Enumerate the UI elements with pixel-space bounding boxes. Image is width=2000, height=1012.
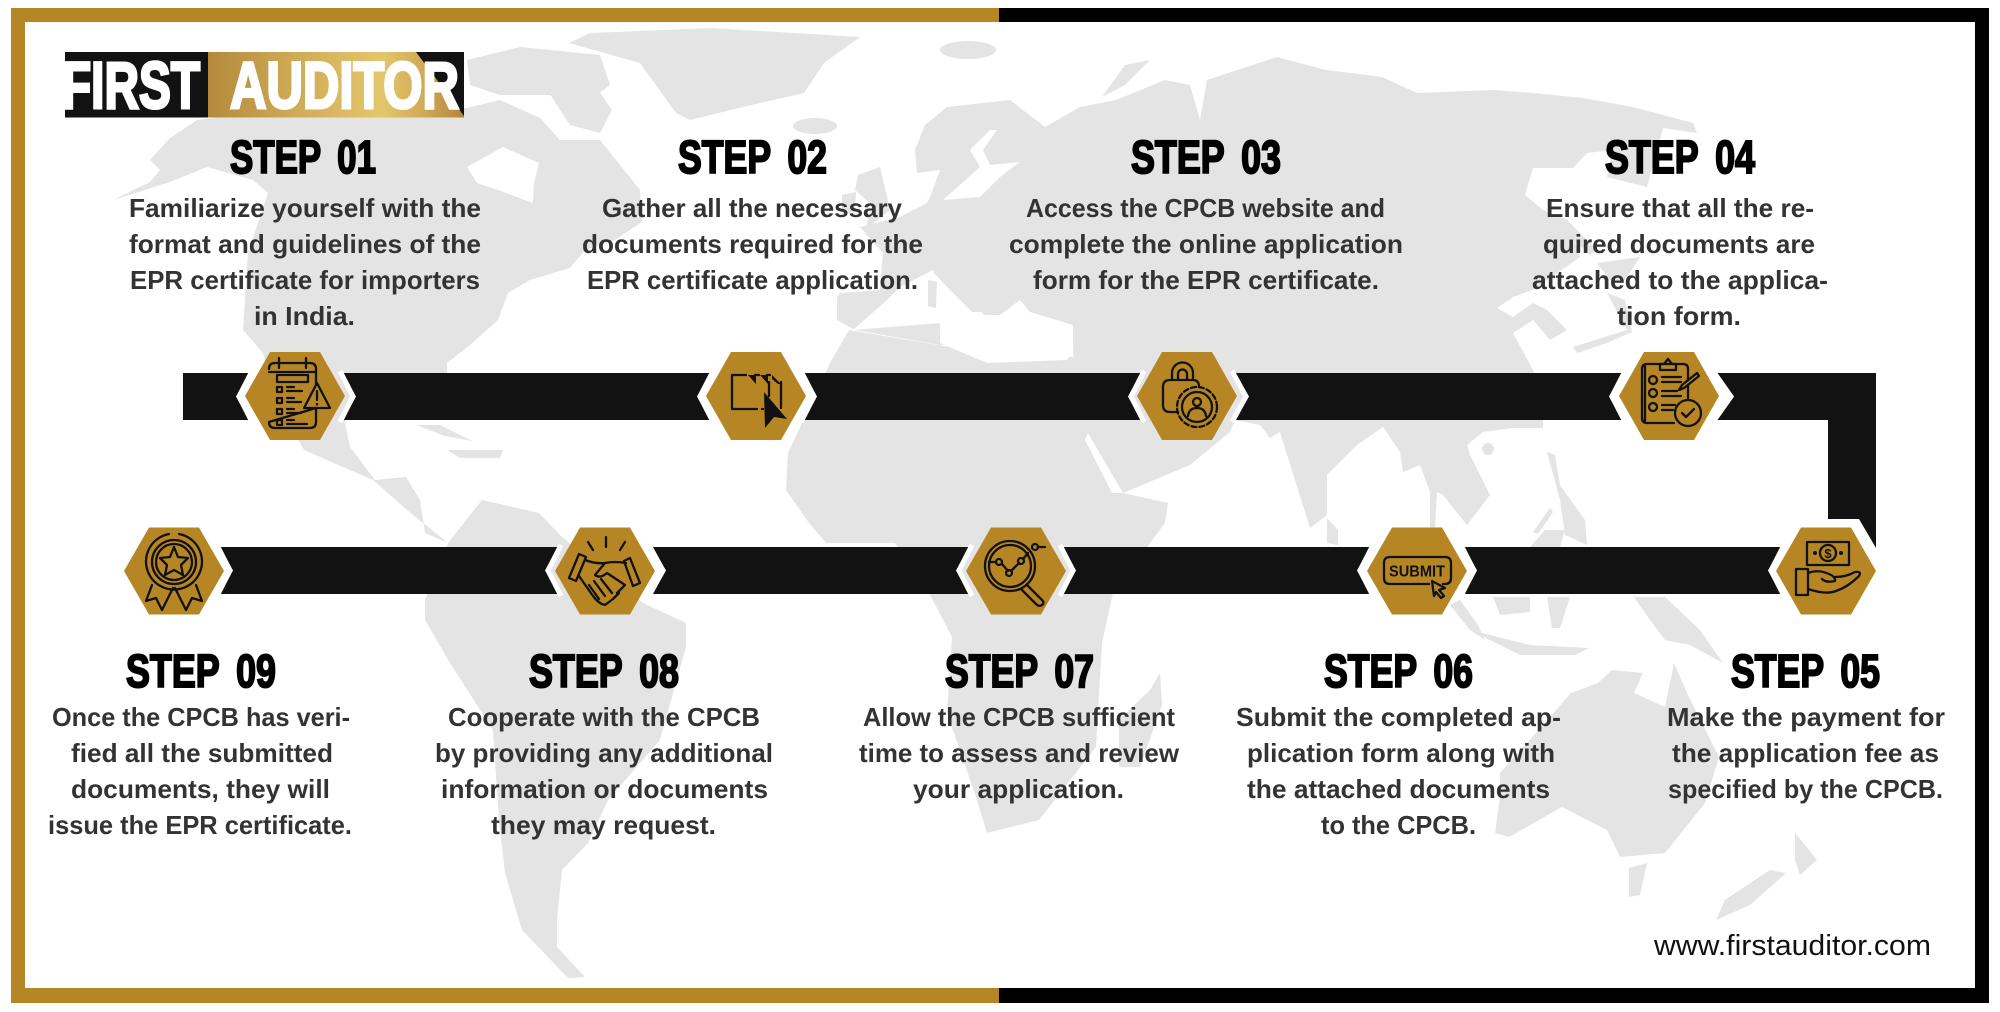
- description: the attached documents: [1247, 774, 1550, 804]
- logo: FIRST: [62, 48, 200, 122]
- icon: step 3 lock and user gear: [1137, 352, 1237, 440]
- description: they may request.: [491, 810, 716, 840]
- heading: STEP 01: [230, 131, 376, 183]
- description: attached to the applica-: [1532, 265, 1828, 295]
- step 03: [1009, 131, 1403, 295]
- description: [1532, 193, 1828, 331]
- description: [1667, 702, 1945, 804]
- icon: step 2 documents with cursor: [706, 352, 806, 440]
- description: quired documents are: [1543, 229, 1815, 259]
- description: Submit the completed ap-: [1236, 702, 1561, 732]
- heading: STEP 04: [1605, 131, 1755, 183]
- description: fied all the submitted: [71, 738, 333, 768]
- description: [1236, 702, 1561, 840]
- website url: www.firstauditor.com: [1653, 930, 1931, 962]
- world map background: [113, 28, 1817, 978]
- step 09: [48, 645, 352, 840]
- step 01: [129, 131, 481, 331]
- description: [859, 702, 1180, 804]
- description: format and guidelines of the: [129, 229, 481, 259]
- description: time to assess and review: [859, 738, 1180, 768]
- icon: step 5 hand with banknote: [1776, 528, 1876, 614]
- description: [1009, 193, 1403, 295]
- description: documents, they will: [71, 774, 330, 804]
- icon: step 5 hand with banknote: $: [1824, 546, 1832, 561]
- step 04: [1532, 131, 1828, 331]
- description: Cooperate with the CPCB: [448, 702, 760, 732]
- description: Access the CPCB website and: [1026, 193, 1385, 223]
- icon: step 7 magnifier with graph: [966, 528, 1066, 614]
- step 05: [1667, 645, 1945, 804]
- frame: gold left half: [11, 8, 999, 1003]
- description: EPR certificate for importers: [130, 265, 480, 295]
- description: issue the EPR certificate.: [48, 810, 352, 840]
- logo: AUDITOR: [230, 48, 459, 122]
- description: specified by the CPCB.: [1668, 774, 1943, 804]
- description: the application fee as: [1672, 738, 1939, 768]
- description: by providing any additional: [435, 738, 773, 768]
- description: Allow the CPCB sufficient: [863, 702, 1175, 732]
- description: complete the online application: [1009, 229, 1403, 259]
- description: Familiarize yourself with the: [129, 193, 481, 223]
- description: your application.: [913, 774, 1124, 804]
- icon: step 6 submit button: SUBMIT: [1389, 564, 1445, 580]
- description: tion form.: [1617, 301, 1741, 331]
- logo: [59, 48, 464, 122]
- description: form for the EPR certificate.: [1033, 265, 1379, 295]
- description: to the CPCB.: [1321, 810, 1476, 840]
- heading: STEP 09: [126, 645, 276, 697]
- step 06: [1236, 645, 1561, 840]
- icon: step 8 handshake: [555, 528, 655, 614]
- description: [435, 702, 773, 840]
- description: information or documents: [441, 774, 768, 804]
- description: Ensure that all the re-: [1546, 193, 1814, 223]
- heading: STEP 07: [945, 645, 1094, 697]
- description: Make the payment for: [1667, 702, 1945, 732]
- description: in India.: [254, 301, 355, 331]
- description: Gather all the necessary: [602, 193, 903, 223]
- icon: step 4 clipboard with check: [1619, 352, 1719, 440]
- frame: black right half: [999, 8, 1989, 1003]
- description: EPR certificate application.: [587, 265, 918, 295]
- heading: STEP 03: [1131, 131, 1281, 183]
- description: documents required for the: [582, 229, 923, 259]
- description: [48, 702, 352, 840]
- description: [582, 193, 923, 295]
- icon: step 9 award badge with star: [124, 528, 224, 614]
- heading: STEP 05: [1731, 645, 1880, 697]
- step 08: [435, 645, 773, 840]
- heading: STEP 08: [529, 645, 679, 697]
- step 02: [582, 131, 923, 295]
- heading: STEP 06: [1324, 645, 1473, 697]
- icon: step 6 submit button: [1367, 528, 1467, 614]
- step 07: [859, 645, 1180, 804]
- timeline ribbon: bottom row: [220, 547, 1781, 594]
- description: Once the CPCB has veri-: [52, 702, 350, 732]
- description: [129, 193, 481, 331]
- heading: STEP 02: [678, 131, 827, 183]
- description: plication form along with: [1247, 738, 1555, 768]
- icon: step 1 checklist with warning: [245, 352, 345, 440]
- timeline ribbon: top row: [183, 373, 1876, 548]
